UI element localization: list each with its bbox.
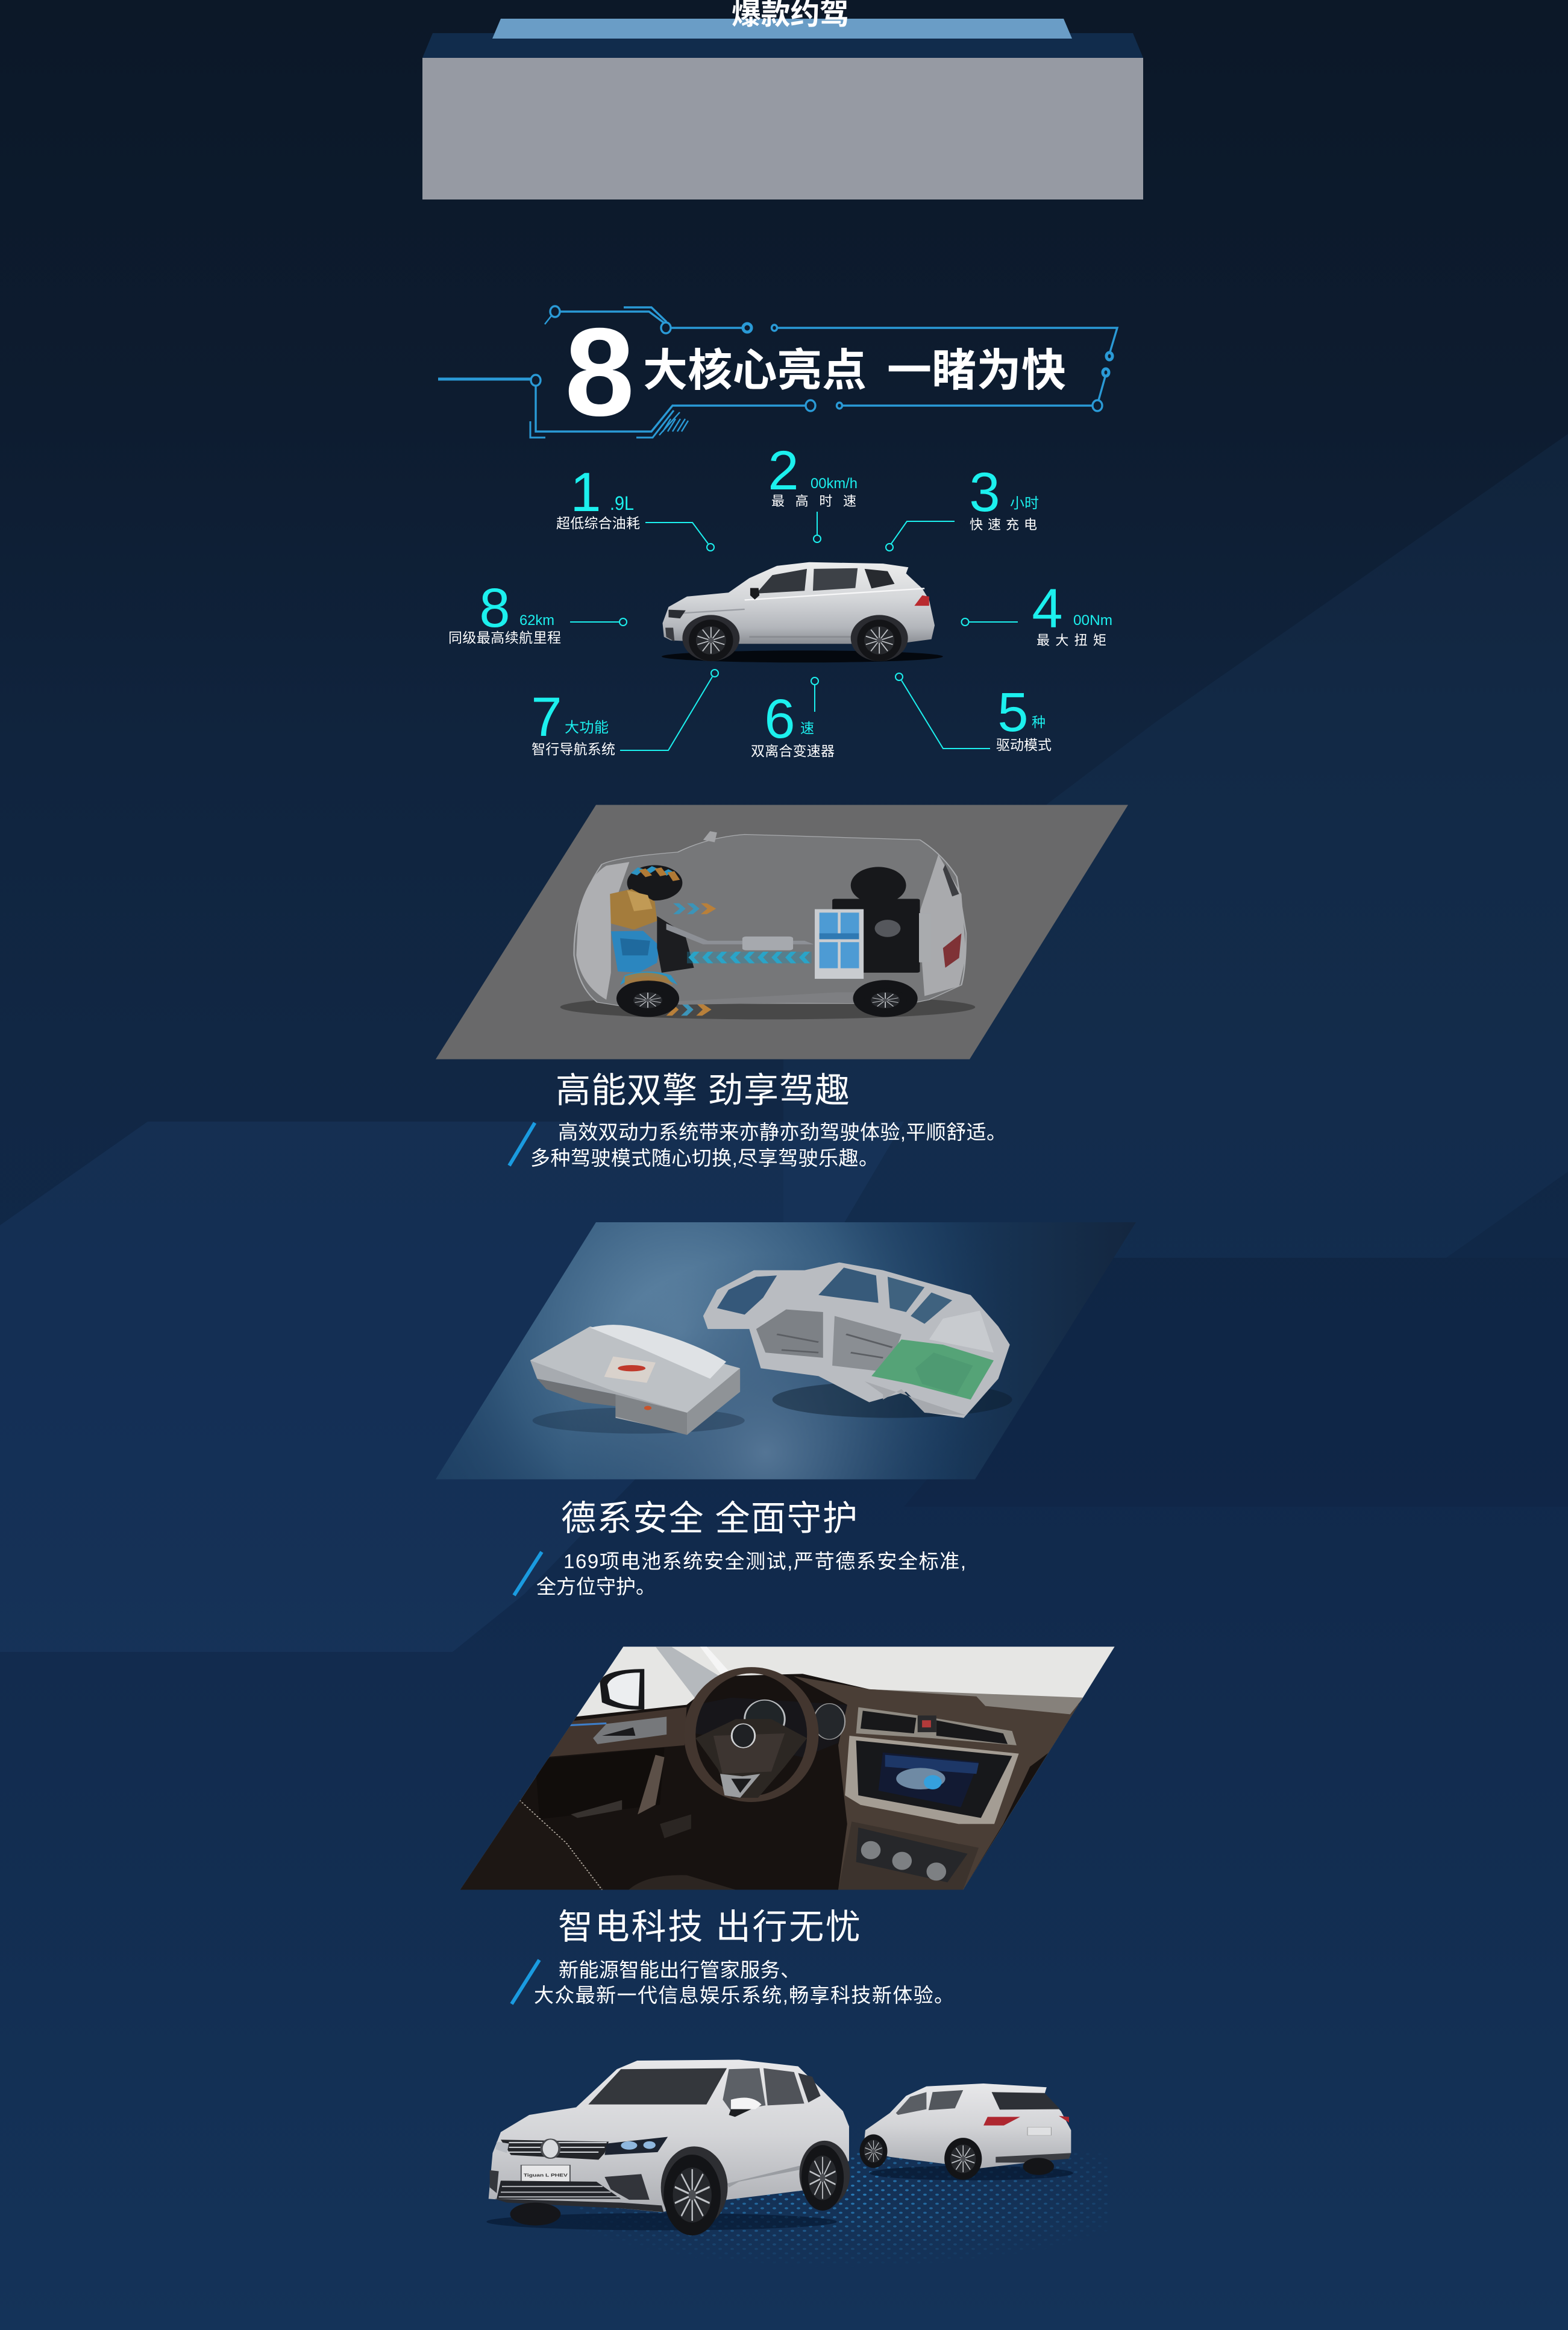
- highlight 3: [886, 462, 1039, 551]
- highlight 4: [962, 578, 1112, 648]
- grey placeholder panel: [422, 58, 1143, 199]
- section heading: 8 core highlights: 一睹为快: [887, 345, 1066, 395]
- panel: dual power: [436, 805, 1128, 1169]
- highlight 5: 5: [997, 682, 1029, 743]
- section heading: 8 core highlights: [438, 303, 1117, 442]
- slash accent: [512, 1960, 539, 2004]
- panel: smart technology: [460, 1647, 1115, 2005]
- highlight 6: 速: [800, 720, 814, 736]
- highlight 7: 7: [531, 686, 562, 748]
- description: 新能源智能出行管家服务、: [559, 1959, 800, 1981]
- heading: 高能双擎 劲享驾趣: [556, 1071, 850, 1110]
- dotted floor: [580, 2153, 1108, 2259]
- highlight 2: 00km/h: [811, 476, 858, 492]
- highlight 8: 8: [479, 577, 510, 639]
- highlight 7: [531, 670, 718, 757]
- highlight 5: 驱动模式: [996, 737, 1052, 753]
- highlight 1: [556, 462, 714, 551]
- body in white: [703, 1263, 1010, 1418]
- highlights diagram: [448, 440, 1112, 759]
- description: 大众最新一代信息娱乐系统,畅享科技新体验。: [534, 1984, 954, 2006]
- battery and body illustration: [436, 1222, 1136, 1479]
- highlight 3: 小时: [1010, 495, 1039, 512]
- heading: 智电科技 出行无忧: [558, 1908, 861, 1947]
- description: [536, 1550, 966, 1598]
- interior illustration: [460, 1647, 1115, 1890]
- highlight 2: 2: [768, 440, 799, 501]
- highlight 5: 种: [1032, 714, 1046, 730]
- slash accent: [509, 1123, 535, 1166]
- panel: German safety: [436, 1222, 1136, 1598]
- highlight 2: 最高时速: [771, 494, 856, 509]
- slash accent: [514, 1552, 542, 1595]
- circuit decoration: [438, 306, 1117, 438]
- highlight 1: .9L: [610, 492, 634, 514]
- banner light tab: [492, 19, 1072, 39]
- rear small car: [860, 2083, 1073, 2181]
- description: 多种驾驶模式随心切换,尽享驾驶乐趣。: [530, 1147, 879, 1169]
- highlight 4: 4: [1032, 578, 1063, 639]
- description: [530, 1121, 1006, 1169]
- description: [534, 1959, 954, 2006]
- chassis illustration: [436, 805, 1128, 1060]
- highlight 1: 1: [570, 462, 601, 523]
- highlight 6: [751, 677, 835, 759]
- highlight 4: 最大扭矩: [1036, 633, 1106, 648]
- highlight 2: [768, 440, 858, 542]
- banner dark trapezoid: [422, 33, 1143, 58]
- highlight 5: [895, 673, 1052, 753]
- highlight 8: 同级最高续航里程: [448, 630, 561, 645]
- battery pack: [530, 1325, 740, 1435]
- front big car: [486, 2059, 850, 2235]
- description: 高效双动力系统带来亦静亦劲驾驶体验,平顺舒适。: [558, 1121, 1006, 1143]
- top banner panel: [422, 0, 1143, 199]
- highlight 4: 00Nm: [1073, 612, 1112, 629]
- heading text: 大核心亮点: [643, 345, 867, 395]
- highlight 1: 超低综合油耗: [556, 515, 640, 531]
- highlight 8: 62km: [519, 612, 554, 629]
- highlight 8: [448, 577, 627, 645]
- highlight 6: 双离合变速器: [751, 743, 835, 759]
- heading: 德系安全 全面守护: [561, 1499, 858, 1538]
- highlight 6: 6: [764, 688, 795, 750]
- highlight 7: 智行导航系统: [532, 741, 615, 757]
- highlight 7: 大功能: [565, 720, 609, 736]
- car side view: [662, 562, 943, 662]
- description: 169项电池系统安全测试,严苛德系安全标准,: [563, 1550, 966, 1572]
- big numeral 8: 8: [565, 303, 635, 442]
- closing car photo: [486, 2059, 1109, 2278]
- description: 全方位守护。: [536, 1575, 656, 1598]
- highlight 3: 3: [969, 462, 1000, 523]
- highlight 3: 快速充电: [970, 517, 1037, 532]
- plate text: Tiguan L PHEV: [524, 2173, 568, 2178]
